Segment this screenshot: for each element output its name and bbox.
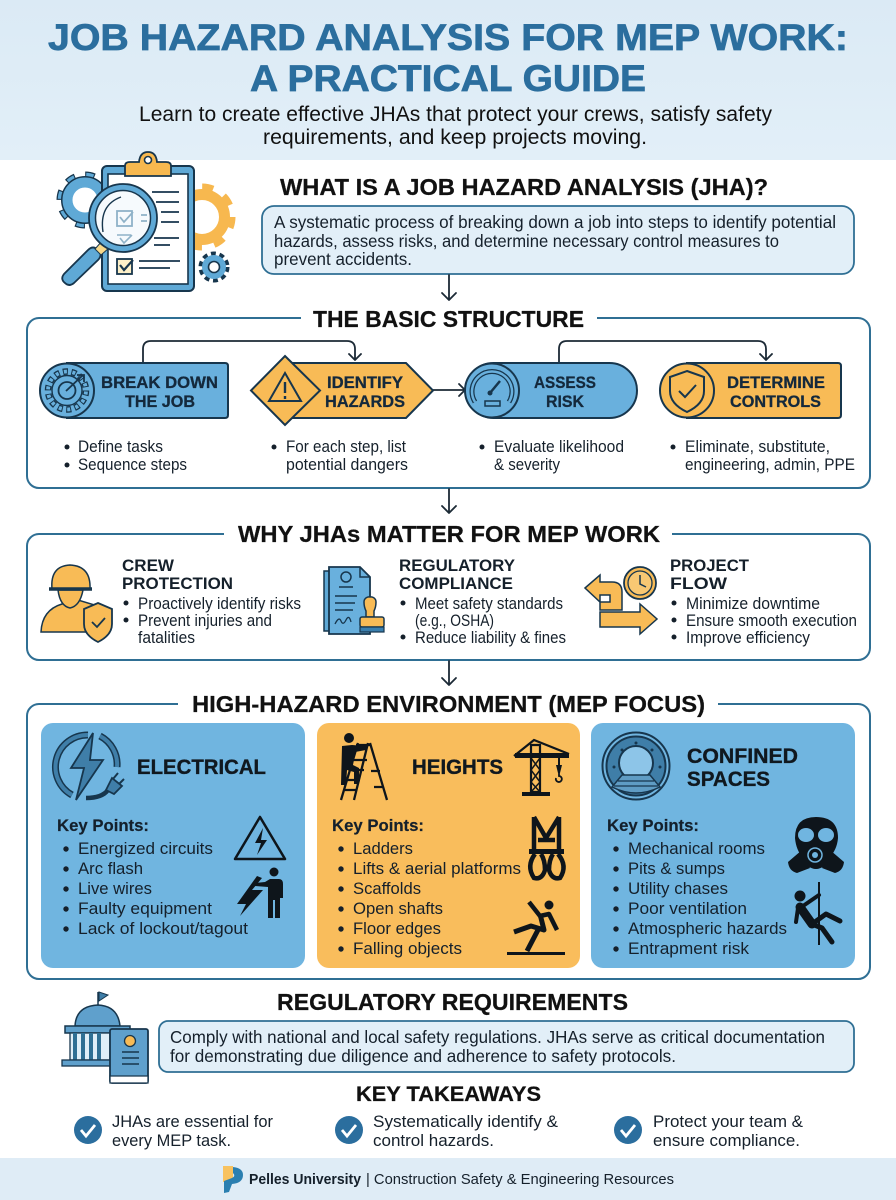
icon: person with shock (237, 868, 283, 918)
heading and list: regulatory compliance (399, 557, 566, 647)
bullets: determine: Eliminate, substitute, (685, 438, 830, 456)
title (48, 17, 848, 99)
title: A PRACTICAL GUIDE (250, 58, 646, 99)
heading and list: regulatory compliance: (e.g., OSHA) (415, 612, 494, 630)
panel: high-hazard environment (27, 691, 870, 979)
card title: heights: HEIGHTS (412, 756, 503, 779)
heading and list: crew protection: fatalities (138, 629, 195, 647)
bullets: identify: For each step, list (286, 438, 406, 456)
heading and list: crew protection: Proactively identify risks (138, 595, 301, 613)
step: assess risk: RISK (546, 392, 585, 411)
heading and list: crew protection: PROTECTION (122, 575, 233, 593)
heading and list: project flow: Minimize downtime (686, 595, 820, 613)
icon: gas mask (788, 817, 844, 873)
step: identify hazards: IDENTIFY (327, 373, 404, 392)
heading and list: project flow (670, 557, 857, 647)
key points: confined spaces: Utility chases (628, 880, 728, 898)
subtitle: requirements, and keep projects moving. (263, 126, 647, 149)
connector arrows (143, 341, 772, 396)
definition box: A systematic process of breaking down a job into steps to identify potential (274, 212, 836, 232)
key points: electrical: Faulty equipment (78, 900, 212, 918)
heading: why JHAs matter: WHY JHAs MATTER FOR MEP WORK (238, 521, 660, 547)
heading and list: crew protection: CREW (122, 557, 174, 575)
key points: confined spaces: Poor ventilation (628, 900, 747, 918)
key points: confined spaces: Pits & sumps (628, 860, 725, 878)
key points: electrical: Key Points: (57, 816, 149, 835)
heading and list: project flow: Improve efficiency (686, 629, 811, 647)
takeaway 2: control hazards. (373, 1132, 494, 1150)
key points: heights: Falling objects (353, 940, 462, 958)
key points: electrical: Live wires (78, 880, 152, 898)
section: regulatory requirements (159, 989, 854, 1072)
key points: confined spaces: Entrapment risk (628, 940, 750, 958)
heading and list: regulatory compliance: Meet safety standards (415, 595, 563, 613)
heading and list: project flow: Ensure smooth execution (686, 612, 857, 630)
step: determine controls (660, 363, 841, 418)
key points: electrical: Lack of lockout/tagout (78, 920, 248, 938)
takeaway 3 (614, 1113, 803, 1150)
step: break down the job: BREAK DOWN (101, 373, 218, 392)
takeaway 2: Systematically identify & (373, 1113, 558, 1131)
card title: confined spaces: SPACES (687, 768, 770, 791)
arrow: definition to structure (442, 275, 456, 300)
step: assess risk (465, 363, 637, 418)
icon: falling person (507, 900, 565, 955)
regulatory description box: Comply with national and local safety regulations. JHAs serve as critical documentation (170, 1027, 825, 1047)
key points: electrical (57, 816, 248, 938)
step: assess risk: ASSESS (534, 373, 596, 392)
bullets: identify (272, 438, 408, 474)
key points: heights: Lifts & aerial platforms (353, 860, 521, 878)
section: key takeaways (74, 1083, 803, 1150)
definition box: prevent accidents. (274, 249, 412, 269)
icon: Pelles logo (223, 1166, 243, 1193)
regulatory description box: for demonstrating due diligence and adherence to safety protocols. (170, 1046, 676, 1066)
definition box: hazards, assess risks, and determine necessary control measures to (274, 231, 779, 251)
bullets: break down (64, 438, 187, 474)
icon: manhole (602, 732, 670, 800)
definition box (262, 206, 854, 274)
takeaway 3: ensure compliance. (653, 1132, 800, 1150)
key points: heights: Floor edges (353, 920, 441, 938)
regulatory description box (159, 1021, 854, 1072)
bullets: assess: Evaluate likelihood (494, 438, 624, 456)
subtitle: Learn to create effective JHAs that protect your crews, satisfy safety (139, 103, 772, 126)
bullets: determine: engineering, admin, PPE (685, 456, 855, 474)
key points: confined spaces (607, 816, 787, 958)
bullets: break down: Define tasks (78, 438, 163, 456)
arrow: structure to why (442, 489, 456, 513)
heading and list: regulatory compliance: COMPLIANCE (399, 575, 513, 593)
heading and list: crew protection (122, 557, 301, 647)
heading: high-hazard environment: HIGH-HAZARD ENVIRONMENT (MEP FOCUS) (192, 691, 705, 717)
step: determine controls: CONTROLS (730, 392, 821, 411)
heading and list: regulatory compliance: REGULATORY (399, 557, 515, 575)
bullets: assess (480, 438, 624, 474)
icon: arrows and clock (585, 567, 657, 634)
key points: confined spaces: Key Points: (607, 816, 699, 835)
heading and list: regulatory compliance: Reduce liability & fines (415, 629, 566, 647)
key points: heights: Ladders (353, 840, 413, 858)
arrow: why to hazards (442, 661, 456, 685)
key points: heights (332, 816, 521, 958)
icon: worker with shield (41, 565, 112, 642)
subtitle (139, 103, 772, 149)
heading: key takeaways: KEY TAKEAWAYS (356, 1083, 541, 1106)
footer text: | Construction Safety & Engineering Resources (366, 1171, 674, 1188)
step: break down the job: THE JOB (125, 392, 195, 411)
step: identify hazards (251, 356, 433, 425)
icon: crane (514, 740, 569, 796)
step: determine controls: DETERMINE (727, 373, 825, 392)
key points: electrical: Arc flash (78, 860, 143, 878)
step: identify hazards: HAZARDS (325, 392, 405, 411)
bullets: assess: & severity (494, 456, 561, 474)
icon: clipboard with magnifier and gears (61, 152, 229, 291)
footer (0, 1158, 896, 1200)
card: heights (317, 723, 580, 968)
key points: heights: Open shafts (353, 900, 443, 918)
takeaway 1: JHAs are essential for (112, 1113, 273, 1131)
card: electrical (41, 723, 305, 968)
card title: confined spaces (687, 745, 798, 791)
panel: why JHAs matter (27, 521, 870, 660)
heading and list: crew protection: Prevent injuries and (138, 612, 272, 630)
footer text: Pelles University (249, 1171, 362, 1188)
header banner (0, 0, 896, 160)
step: break down the job (40, 363, 228, 418)
panel: the basic structure (27, 306, 870, 488)
key points: heights: Scaffolds (353, 880, 421, 898)
icon: documents and stamp (324, 567, 384, 634)
takeaway 1 (74, 1113, 273, 1150)
icon: government building and handbook (62, 992, 148, 1083)
key points: confined spaces: Atmospheric hazards (628, 920, 787, 938)
icon: safety harness (529, 817, 564, 878)
bullets: determine (670, 438, 855, 474)
takeaway 1: every MEP task. (112, 1132, 231, 1150)
takeaway 3: Protect your team & (653, 1113, 803, 1131)
icon: worker on ladder (341, 733, 387, 800)
key points: electrical: Energized circuits (78, 840, 213, 858)
heading: the basic structure: THE BASIC STRUCTURE (313, 306, 584, 332)
icon: lightning and plug (55, 733, 124, 800)
icon: person on rope (794, 882, 840, 945)
takeaway 2 (335, 1113, 558, 1150)
bullets: break down: Sequence steps (78, 456, 187, 474)
card: confined spaces (591, 723, 855, 968)
key points: confined spaces: Mechanical rooms (628, 840, 765, 858)
title: JOB HAZARD ANALYSIS FOR MEP WORK: (48, 17, 848, 58)
heading and list: project flow: FLOW (670, 575, 727, 593)
card title: electrical: ELECTRICAL (137, 756, 266, 779)
heading and list: project flow: PROJECT (670, 557, 749, 575)
card title: confined spaces: CONFINED (687, 745, 798, 768)
heading: regulatory requirements: REGULATORY REQUIREMENTS (277, 989, 628, 1015)
heading: what is a JHA: WHAT IS A JOB HAZARD ANALYSIS (JHA)? (280, 174, 768, 200)
bullets: identify: potential dangers (286, 456, 408, 474)
icon: high voltage warning (235, 817, 285, 859)
section: what is a JHA (262, 174, 854, 274)
key points: heights: Key Points: (332, 816, 424, 835)
